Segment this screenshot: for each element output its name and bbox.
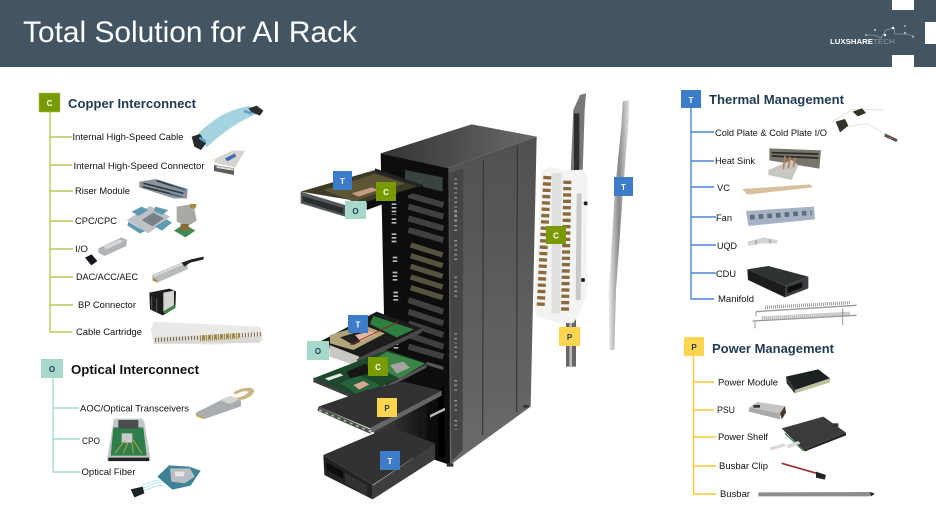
badge P: P	[691, 343, 697, 352]
label: VC	[717, 183, 731, 193]
label: Power Module	[718, 378, 778, 388]
icon: AOC transceiver	[196, 388, 254, 419]
badge T middle tray: T	[356, 320, 361, 330]
label: Cable Cartridge	[76, 327, 142, 337]
badge T top tray: T	[340, 177, 345, 186]
icon: manifold	[753, 303, 857, 328]
label: AOC/Optical Transceivers	[80, 404, 190, 414]
icon: UQD	[747, 237, 777, 246]
icon: high-speed connector	[214, 151, 245, 175]
badge T thermal bar	[614, 177, 633, 196]
rack top bay	[405, 170, 443, 192]
badge C: C	[47, 99, 53, 108]
heading: power management: Power Management	[712, 341, 835, 356]
icon: optical fiber	[131, 465, 201, 497]
badge O	[41, 359, 63, 378]
thermal tree lines	[691, 108, 716, 299]
lower trays	[313, 312, 445, 499]
icon: high-speed cable	[192, 106, 263, 150]
badge C top tray	[376, 182, 396, 201]
label: Busbar	[720, 489, 750, 499]
label: Riser Module	[75, 186, 130, 196]
rack front	[381, 153, 450, 465]
label: DAC/ACC/AEC	[76, 272, 138, 282]
power product icons	[749, 369, 875, 496]
side holes	[452, 178, 460, 430]
label: UQD	[717, 241, 738, 251]
badge O top tray: O	[352, 207, 359, 216]
label: PSU	[717, 405, 735, 415]
badge T top tray	[333, 171, 352, 190]
server units	[408, 195, 443, 357]
panel: rack illustration	[381, 93, 629, 467]
thermal product icons	[742, 108, 898, 328]
icon: CPC	[127, 204, 197, 237]
logo: Luxshare Tech: TECH	[873, 37, 895, 46]
icon: busbar clip	[782, 463, 826, 480]
label: Power Shelf	[718, 432, 769, 442]
icon: heat sink	[768, 148, 821, 180]
label: Internal High-Speed Cable	[72, 132, 184, 142]
label: CPC/CPC	[75, 216, 118, 226]
left post holes	[394, 203, 397, 378]
badge C	[39, 93, 60, 112]
power tree lines	[694, 356, 716, 494]
icon: cold plate	[832, 108, 898, 142]
badge O top tray	[345, 201, 366, 219]
logo: Luxshare Tech	[830, 25, 914, 46]
badge C top tray: C	[383, 188, 389, 197]
label: Busbar Clip	[719, 461, 768, 471]
label: BP Connector	[78, 300, 136, 310]
label: CDU	[716, 269, 736, 279]
badge T thermal bar: T	[621, 183, 626, 192]
panel: optical interconnect	[41, 359, 200, 477]
icon: IO	[85, 237, 127, 265]
icon: riser module	[139, 179, 188, 198]
icon: BP connector	[149, 289, 176, 315]
copper product icons	[85, 106, 263, 345]
badges on rack	[307, 171, 633, 470]
badge P busbar	[559, 327, 580, 346]
label: I/O	[75, 244, 88, 254]
badge T middle tray	[348, 315, 368, 333]
label: Heat Sink	[715, 156, 755, 166]
panel: power management	[684, 337, 835, 499]
label: Cold Plate & Cold Plate I/O	[715, 128, 827, 138]
icon: power module	[786, 369, 830, 393]
badge C busbar	[546, 226, 566, 244]
icon: CPO	[107, 419, 150, 461]
badge O middle tray: O	[315, 347, 321, 356]
rack feet	[447, 405, 529, 467]
badge T	[681, 90, 701, 108]
label: Optical Fiber	[82, 467, 136, 477]
tray 4	[317, 362, 445, 434]
badge T CDU	[380, 451, 400, 470]
top tray	[301, 168, 423, 217]
heading: copper interconnect: Copper Interconnect	[68, 96, 197, 111]
icon: fan	[746, 207, 815, 226]
badge O: O	[49, 365, 55, 374]
label: Manifold	[718, 294, 754, 304]
badge P busbar: P	[567, 333, 573, 342]
label: Internal High-Speed Connector	[74, 161, 204, 171]
icon: busbar	[758, 492, 875, 496]
tray 3	[313, 350, 427, 402]
badge C lower tray: C	[375, 363, 381, 372]
title: Total Solution for AI Rack	[23, 16, 358, 49]
label: Fan	[716, 213, 732, 223]
side panel strip	[449, 168, 463, 462]
badge T CDU: T	[388, 457, 393, 466]
icon: PSU	[749, 402, 786, 419]
rack top	[381, 124, 537, 168]
logo: Luxshare Tech: LUXSHARE	[830, 37, 873, 46]
CDU tray	[323, 427, 435, 499]
optical tree lines	[53, 378, 80, 472]
badge C lower tray	[368, 357, 388, 376]
heading: optical interconnect: Optical Interconnect	[71, 362, 200, 377]
tray 2	[317, 312, 422, 366]
header banner	[0, 0, 936, 67]
badge P power tray	[377, 398, 397, 417]
rack side	[447, 137, 537, 465]
icon: vapor chamber	[742, 184, 813, 195]
badge O middle tray	[307, 341, 329, 360]
thermal bar	[609, 100, 629, 350]
icon: power shelf	[769, 417, 846, 451]
heading: thermal management: Thermal Management	[709, 92, 845, 107]
icon: DAC	[152, 257, 204, 283]
panel: copper interconnect	[39, 93, 204, 337]
badge C busbar: C	[553, 232, 559, 240]
busbar cartridge assembly	[534, 93, 588, 367]
server units: meshed	[411, 245, 443, 298]
badge T: T	[689, 96, 694, 105]
badge P power tray: P	[384, 404, 390, 413]
badge P	[684, 337, 704, 356]
icon: CDU	[747, 266, 808, 297]
black bay behind trays	[373, 387, 445, 459]
label: CPO	[82, 436, 100, 446]
panel: thermal management	[681, 90, 845, 304]
optical product icons	[107, 388, 254, 497]
copper tree lines	[50, 112, 73, 332]
icon: cable cartridge	[151, 322, 263, 345]
